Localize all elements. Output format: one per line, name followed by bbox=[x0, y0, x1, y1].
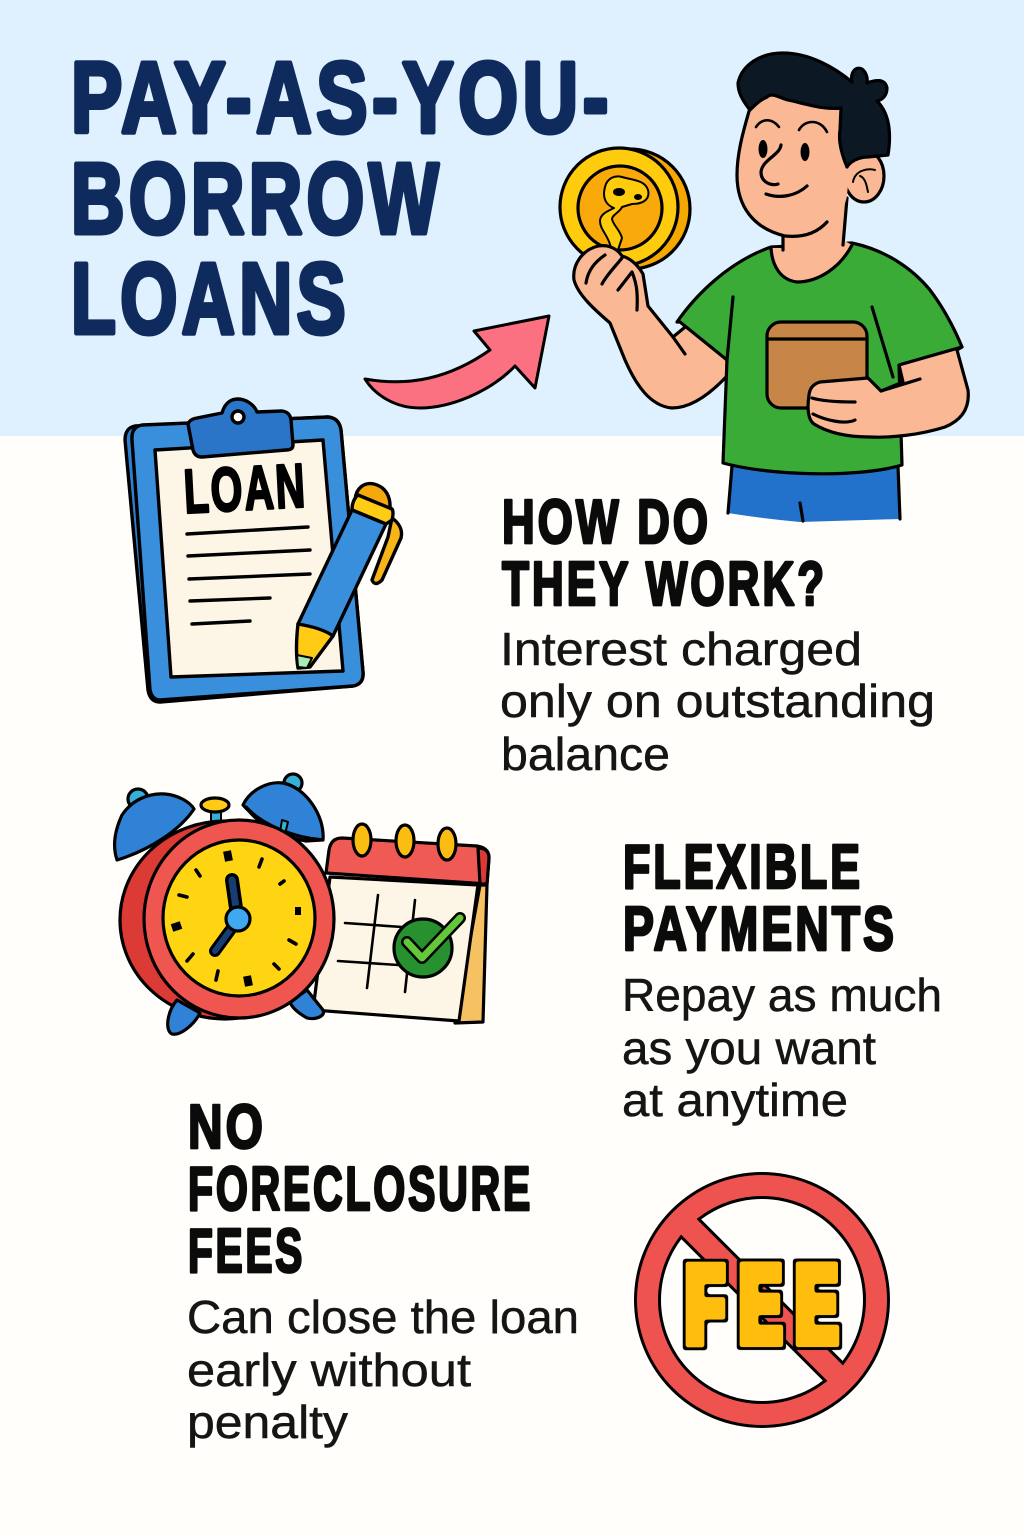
body: Can close the loan bbox=[187, 1291, 579, 1343]
background: top blue band bbox=[0, 0, 1024, 436]
icon: no fee prohibition sign bbox=[634, 1172, 890, 1428]
title: PAY-AS-YOU- bbox=[71, 42, 613, 154]
body: early without bbox=[187, 1344, 471, 1396]
neck bbox=[771, 190, 852, 282]
title bbox=[71, 42, 613, 355]
clock feet bbox=[168, 990, 324, 1034]
ear bbox=[844, 150, 884, 202]
eyes and brows bbox=[756, 120, 827, 161]
hair bbox=[738, 53, 890, 167]
pen bbox=[296, 484, 402, 668]
coin bbox=[560, 148, 690, 269]
heading: FEES bbox=[188, 1217, 305, 1286]
nose and smile bbox=[761, 145, 807, 196]
icon: alarm clock and calendar bbox=[115, 774, 489, 1034]
ticks bbox=[172, 851, 301, 986]
shirt bbox=[677, 243, 962, 474]
text block: no foreclosure fees bbox=[187, 1093, 579, 1448]
heading: THEY WORK? bbox=[502, 550, 827, 619]
body bbox=[500, 623, 935, 780]
title: LOANS bbox=[71, 243, 350, 355]
heading: PAYMENTS bbox=[623, 895, 897, 964]
heading bbox=[623, 833, 897, 964]
icon: loan clipboard bbox=[125, 399, 402, 702]
text lines bbox=[187, 527, 310, 624]
calendar bbox=[313, 824, 489, 1023]
heading: FLEXIBLE bbox=[623, 833, 863, 902]
body: as you want bbox=[622, 1022, 876, 1074]
clipboard board bbox=[125, 417, 363, 702]
wallet bbox=[767, 322, 867, 408]
clock body front bbox=[144, 820, 334, 1018]
body: penalty bbox=[187, 1396, 348, 1448]
clip bbox=[188, 399, 293, 457]
body bbox=[187, 1291, 579, 1448]
body: Interest charged bbox=[500, 623, 862, 675]
FEE label: FEE bbox=[687, 1242, 836, 1366]
body: Repay as much bbox=[622, 969, 942, 1021]
text block: how do they work bbox=[500, 488, 935, 780]
body: at anytime bbox=[622, 1074, 848, 1126]
body: balance bbox=[501, 728, 670, 780]
body: only on outstanding bbox=[500, 675, 935, 727]
clock face bbox=[163, 840, 315, 996]
arrow bbox=[365, 316, 549, 408]
face bbox=[737, 95, 850, 237]
heading: HOW DO bbox=[502, 488, 711, 557]
left arm and hand bbox=[574, 246, 727, 408]
paper bbox=[155, 440, 343, 677]
heading: FORECLOSURE bbox=[188, 1155, 533, 1224]
clock body back bbox=[120, 821, 330, 1019]
body bbox=[622, 969, 942, 1126]
heading bbox=[502, 488, 827, 619]
hand folds bbox=[586, 255, 920, 422]
pants bbox=[728, 466, 900, 522]
LOAN label: LOAN bbox=[182, 452, 309, 527]
bells bbox=[115, 774, 323, 860]
clock hands bbox=[215, 880, 250, 951]
heading: NO bbox=[188, 1093, 266, 1162]
text block: flexible payments bbox=[622, 833, 942, 1126]
title: BORROW bbox=[71, 143, 443, 255]
right arm and hand bbox=[808, 347, 968, 437]
heading bbox=[188, 1093, 533, 1286]
prohibition ring and slash bbox=[634, 1172, 890, 1428]
illustration: person holding coin and wallet bbox=[560, 53, 968, 522]
